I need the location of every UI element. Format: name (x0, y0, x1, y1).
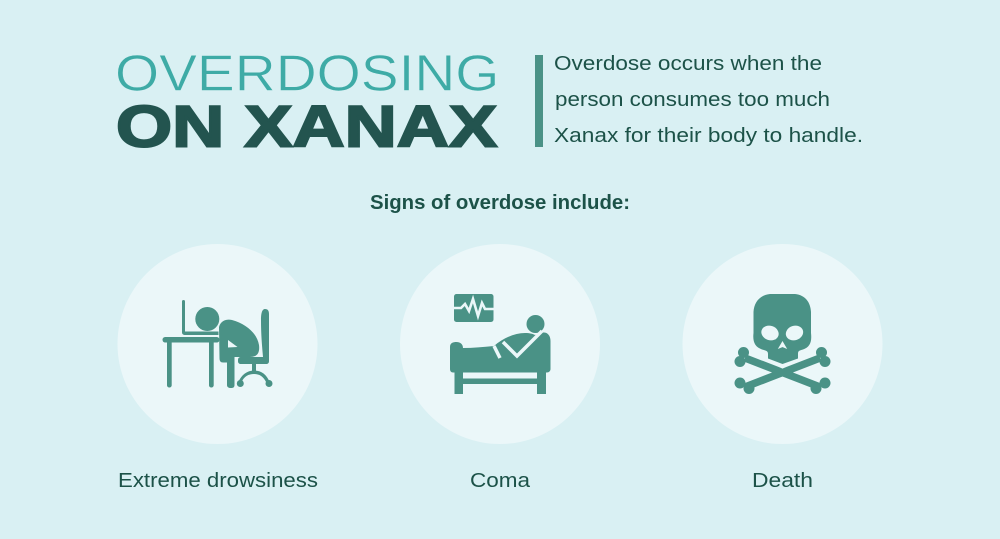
title: OVERDOSING (115, 45, 499, 102)
circle background (118, 244, 318, 444)
label: Extreme drowsiness (118, 470, 318, 492)
title: ON XANAX (116, 94, 497, 159)
label: Death (752, 470, 813, 492)
title (115, 45, 499, 159)
intro text: person consumes too much (555, 89, 830, 111)
panel: extreme drowsiness (118, 244, 318, 492)
circle background (682, 244, 882, 444)
divider bar (535, 55, 543, 147)
intro text: Xanax for their body to handle. (554, 125, 863, 147)
panel: death (682, 244, 882, 492)
circle background (400, 244, 600, 444)
icon: skull and crossbones (734, 294, 830, 394)
icon: patient in bed with monitor (450, 294, 550, 394)
icon: person asleep at desk (162, 300, 272, 388)
intro text (554, 53, 863, 147)
subheading: Signs of overdose include: (370, 192, 630, 214)
panel: coma (400, 244, 600, 492)
intro text: Overdose occurs when the (554, 53, 822, 75)
label: Coma (470, 470, 531, 492)
